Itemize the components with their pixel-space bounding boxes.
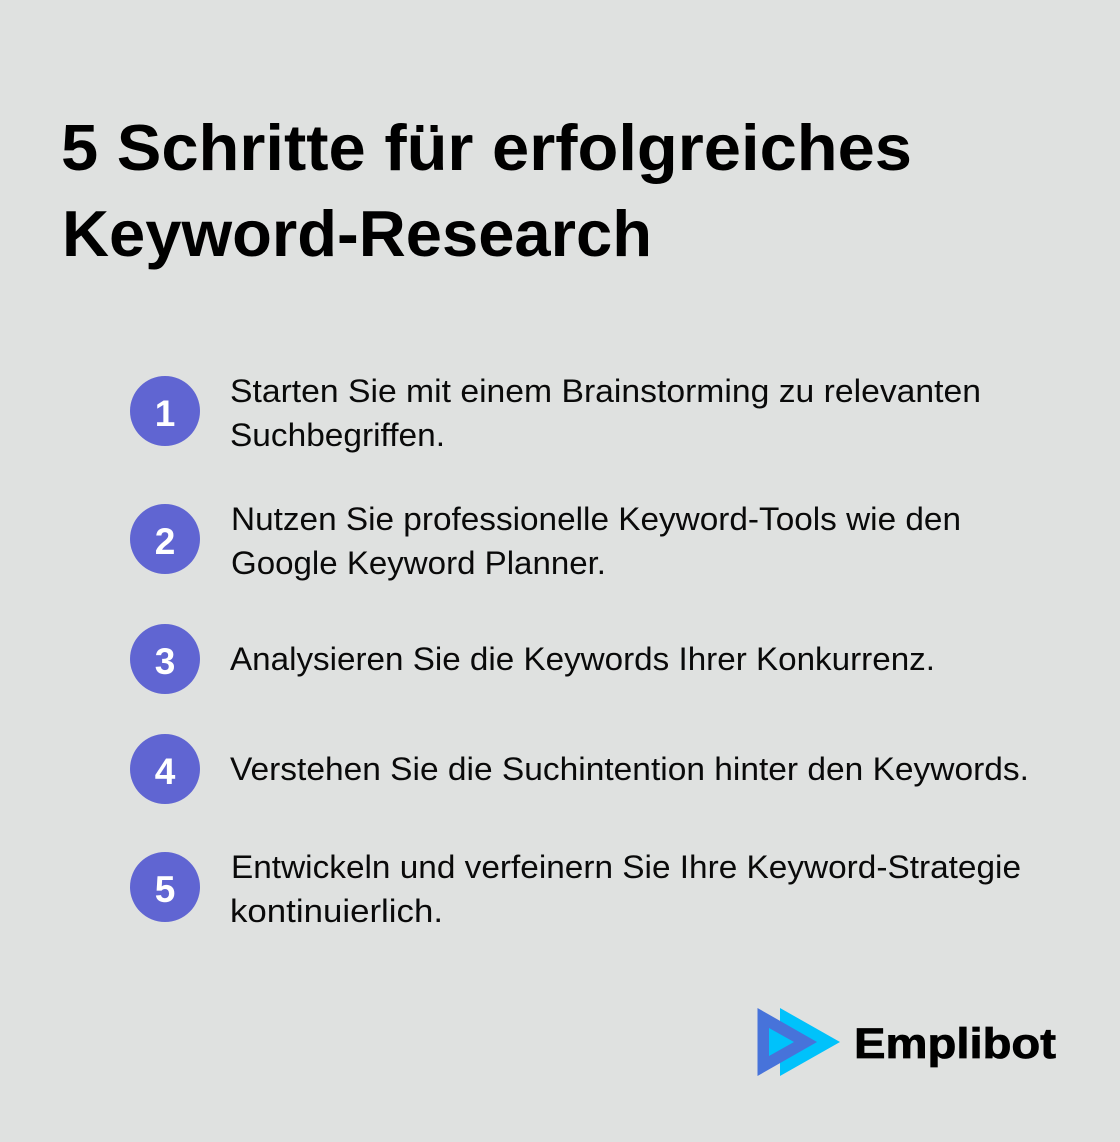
- step 3 number badge: 3: [155, 641, 175, 682]
- step 2 text: [231, 501, 961, 581]
- step 3 number badge: [130, 624, 200, 694]
- step 2: [130, 501, 961, 581]
- step 5 number badge: [130, 852, 200, 922]
- step 1 text: Suchbegriffen.: [230, 417, 445, 453]
- logo: Emplibot: [758, 1008, 1056, 1076]
- title: [61, 111, 912, 270]
- step 2 number badge: [130, 504, 200, 574]
- step 1 text: [230, 373, 981, 453]
- step 5 text: kontinuierlich.: [230, 893, 443, 929]
- step 4: [130, 734, 1029, 804]
- step 2 text: Nutzen Sie professionelle Keyword-Tools wie den: [231, 501, 961, 537]
- step 3: [130, 624, 935, 694]
- step 1 number badge: 1: [155, 393, 175, 434]
- title: 5 Schritte für erfolgreiches: [61, 111, 912, 184]
- step 4 number badge: [130, 734, 200, 804]
- step 2 text: Google Keyword Planner.: [231, 545, 606, 581]
- step 4 number badge: 4: [155, 751, 176, 792]
- step 5 number badge: 5: [155, 869, 175, 910]
- icon: play triangles: [758, 1008, 840, 1076]
- step 3 text: Analysieren Sie die Keywords Ihrer Konkurrenz.: [230, 641, 935, 677]
- title: Keyword-Research: [62, 197, 652, 270]
- step 1 number badge: [130, 376, 200, 446]
- step 5 text: [230, 849, 1021, 929]
- step 4 text: Verstehen Sie die Suchintention hinter den Keywords.: [230, 751, 1029, 787]
- logo wordmark: Emplibot: [854, 1020, 1056, 1068]
- step 1 text: Starten Sie mit einem Brainstorming zu relevanten: [230, 373, 981, 409]
- step 5: [130, 849, 1021, 929]
- step 2 number badge: 2: [155, 521, 175, 562]
- step 5 text: Entwickeln und verfeinern Sie Ihre Keyword-Strategie: [231, 849, 1021, 885]
- step 1: [130, 373, 981, 453]
